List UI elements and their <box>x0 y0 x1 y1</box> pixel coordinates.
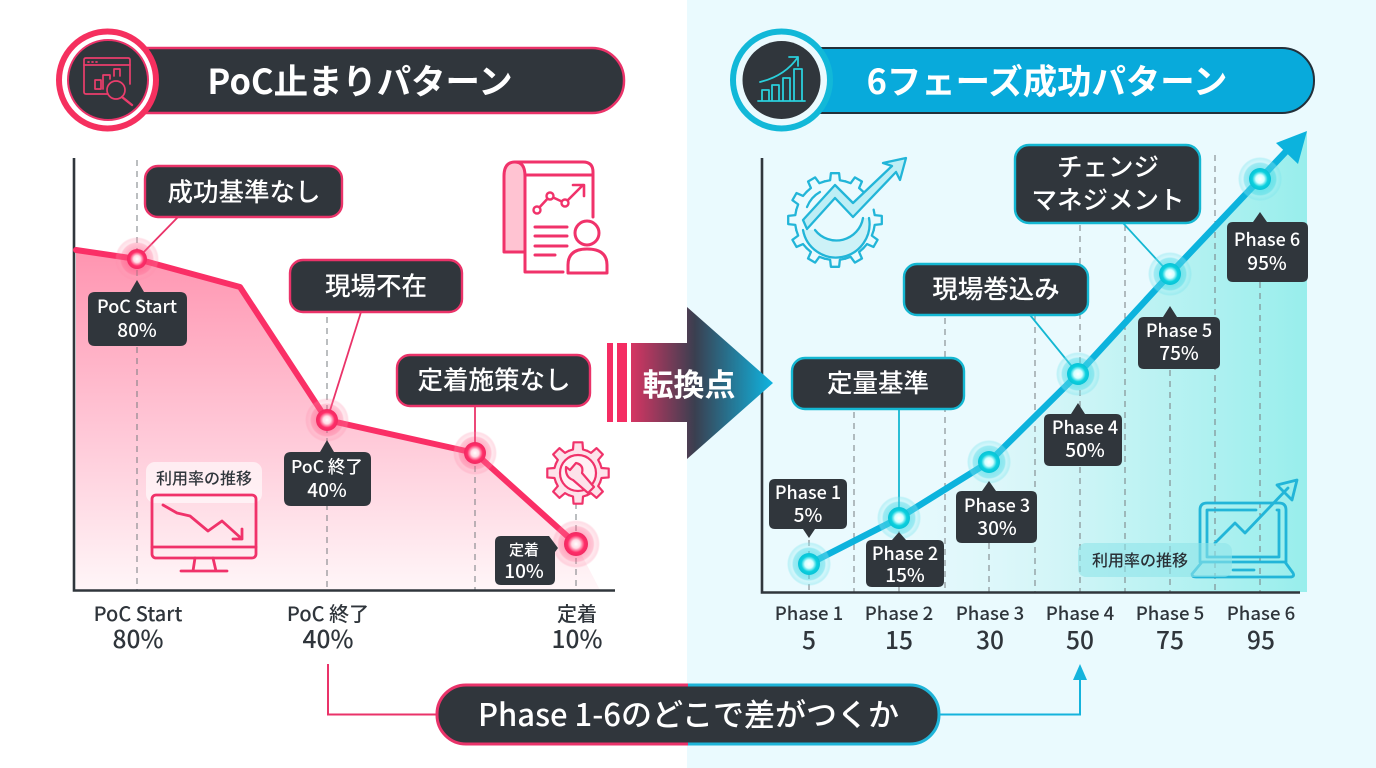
x-axis labels left: 40% <box>303 621 353 656</box>
x-axis labels right: Phase 2 <box>865 599 933 626</box>
usage line <box>76 250 576 544</box>
connector: PoC side to phase pill <box>328 664 440 714</box>
marker: Phase 2 <box>877 496 921 540</box>
label: Phase 6 95% <box>1227 212 1308 282</box>
label: PoC Start 80% <box>88 280 187 346</box>
callout: 現場巻込み <box>904 264 1088 374</box>
label: Phase 3 30% <box>956 481 1037 543</box>
label: Phase 3 30%: Phase 3 <box>964 492 1030 518</box>
label: PoC 終了 40%: 40% <box>307 476 347 503</box>
label: Phase 6 95%: 95% <box>1247 249 1287 276</box>
marker: Phase 4 <box>1056 352 1100 396</box>
axes <box>762 158 1300 592</box>
label: Phase 6 95%: Phase 6 <box>1234 226 1300 252</box>
x-axis labels right: Phase 1 <box>775 599 843 626</box>
x-axis labels left: PoC Start <box>94 598 182 627</box>
icon: usage trend laptop: 利用率の推移 <box>1092 547 1188 571</box>
marker: PoC 終了 <box>305 398 349 442</box>
label: PoC 終了 40% <box>284 440 371 506</box>
label: PoC Start 80%: 80% <box>117 316 157 343</box>
x-axis labels right: 30 <box>976 622 1004 657</box>
callout: 成功基準なし <box>137 166 342 259</box>
arrow: pill to Phase 4 <box>938 664 1087 714</box>
axes <box>74 158 615 590</box>
callout: 成功基準なし: 成功基準なし <box>167 172 321 209</box>
callout: チェンジマネジメント: チェンジ <box>1057 147 1159 184</box>
x-axis labels left: 80% <box>113 621 163 656</box>
marker: PoC Start <box>115 237 159 281</box>
x-axis labels left: 定着 <box>557 598 597 627</box>
panel: PoC stall pattern <box>59 32 624 656</box>
x-axis labels right: Phase 4 <box>1046 599 1115 626</box>
heading: PoC止まりパターン: PoC止まりパターン <box>207 54 513 104</box>
marker: Phase 5 <box>1148 252 1192 296</box>
x-axis labels right: 15 <box>885 622 913 657</box>
marker: Phase 1 <box>787 542 831 586</box>
x-axis labels right: 50 <box>1066 622 1094 657</box>
growth line with arrow <box>809 131 1307 564</box>
panel: 6-phase success pattern <box>733 32 1314 657</box>
icon: usage trend monitor: 利用率の推移 <box>156 465 252 489</box>
callout: 現場不在: 現場不在 <box>325 266 427 303</box>
label: Phase 3 30%: 30% <box>977 514 1017 541</box>
callout: 定着施策なし <box>397 355 590 453</box>
label: Phase 4 50%: Phase 4 <box>1052 414 1118 440</box>
x-axis labels left: 10% <box>552 621 602 656</box>
label: Phase 4 50%: 50% <box>1065 436 1105 463</box>
label: Phase 4 50% <box>1044 403 1122 466</box>
left chart <box>74 158 615 656</box>
x-axis labels right: 5 <box>802 622 816 657</box>
marker: Phase 6 <box>1238 157 1282 201</box>
label: Phase 2 15%: 15% <box>885 561 925 588</box>
arrow: 転換点 transition: 転換点 <box>642 360 736 405</box>
x-axis labels right: 95 <box>1247 622 1275 657</box>
icon: gear with wrench <box>547 442 609 504</box>
marker: 定着施策 <box>453 431 497 475</box>
label: Phase 1 5%: 5% <box>794 501 822 528</box>
icon: usage trend monitor <box>146 462 262 571</box>
label: Phase 1 5% <box>769 479 847 538</box>
label: PoC 終了 40%: PoC 終了 <box>291 454 363 479</box>
label: Phase 1 5%: Phase 1 <box>775 479 841 505</box>
callout: チェンジマネジメント <box>1015 145 1200 274</box>
label: Phase 2 15%: Phase 2 <box>872 540 938 566</box>
x-axis labels right <box>775 599 1295 657</box>
x-axis labels right: Phase 3 <box>956 599 1024 626</box>
label: Phase 5 75% <box>1138 306 1220 369</box>
arrow: 転換点 transition <box>607 307 773 459</box>
x-axis labels right: Phase 5 <box>1136 599 1204 626</box>
callout: 定量基準 <box>792 358 964 518</box>
label: 定着 10% <box>495 536 558 585</box>
callout pill: Phase 1-6のどこで差がつくか <box>437 685 939 744</box>
x-axis labels left: PoC 終了 <box>287 598 369 627</box>
right chart <box>762 131 1308 657</box>
icon: gear with growth arrow <box>788 158 906 267</box>
callout: 現場不在 <box>290 260 462 420</box>
label: 定着 10%: 定着 <box>509 539 539 560</box>
x-axis labels left <box>94 598 602 656</box>
heading: PoC止まりパターン <box>59 32 624 128</box>
area fill under usage line <box>76 250 600 590</box>
heading: 6フェーズ成功パターン <box>733 32 1314 128</box>
label: PoC Start 80%: PoC Start <box>97 293 177 319</box>
x-axis labels right: 75 <box>1156 622 1184 657</box>
callout pill: Phase 1-6のどこで差がつくか: Phase 1-6のどこで差がつくか <box>478 690 899 735</box>
marker: Phase 3 <box>967 440 1011 484</box>
label: Phase 5 75%: 75% <box>1159 339 1199 366</box>
teal area under growth line <box>809 132 1307 592</box>
label: Phase 2 15% <box>866 532 944 588</box>
callout: チェンジマネジメント: マネジメント <box>1031 180 1185 217</box>
marker: 定着 <box>552 520 600 568</box>
callout: 定量基準: 定量基準 <box>827 363 929 400</box>
callout: 定着施策なし: 定着施策なし <box>417 360 571 397</box>
label: 定着 10%: 10% <box>504 557 544 584</box>
callout: 現場巻込み: 現場巻込み <box>932 269 1060 306</box>
label: Phase 5 75%: Phase 5 <box>1146 317 1212 343</box>
icon: usage trend laptop <box>1078 480 1297 577</box>
x-axis labels right: Phase 6 <box>1227 599 1295 626</box>
heading: 6フェーズ成功パターン: 6フェーズ成功パターン <box>867 54 1227 104</box>
icon: report with user <box>504 162 607 273</box>
